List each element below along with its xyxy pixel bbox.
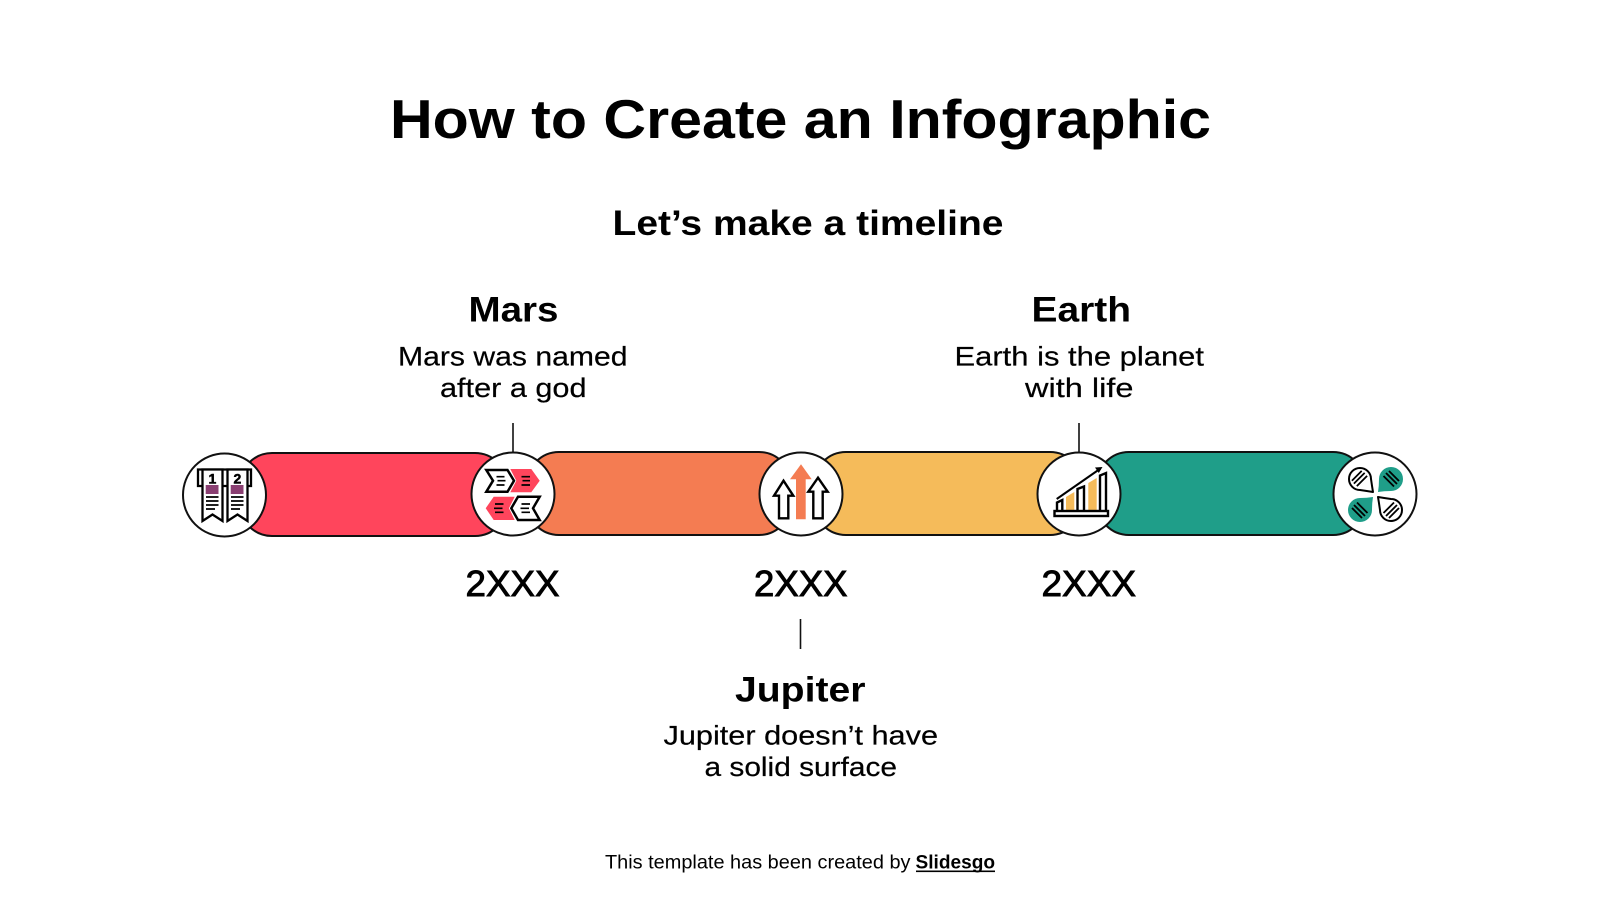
connector: Mars bbox=[512, 423, 514, 453]
footer credit: Slidesgo bbox=[916, 852, 995, 873]
timeline bar bbox=[240, 452, 1365, 536]
text: Jupiter description: Jupiter doesn’t have bbox=[664, 720, 938, 750]
segment: orange bbox=[527, 452, 791, 535]
year label 3: 2XXX bbox=[1042, 563, 1136, 604]
segment: red bbox=[240, 453, 507, 536]
title: How to Create an Infographic bbox=[390, 88, 1211, 150]
connector: Earth bbox=[1078, 423, 1080, 453]
text: Mars description: after a god bbox=[440, 373, 586, 403]
panel: Jupiter bbox=[664, 670, 938, 782]
heading: Jupiter: Jupiter bbox=[735, 670, 866, 710]
year label 1: 2XXX bbox=[466, 563, 560, 604]
text: Earth description: with life bbox=[1024, 373, 1134, 403]
text: Mars description: Mars was named bbox=[398, 341, 628, 371]
panel: Mars bbox=[398, 290, 628, 403]
year label 2: 2XXX bbox=[754, 563, 848, 604]
heading: Earth: Earth bbox=[1032, 290, 1131, 330]
text: Jupiter description bbox=[664, 720, 938, 782]
subtitle: Let’s make a timeline bbox=[612, 204, 1004, 243]
text: Jupiter description: a solid surface bbox=[704, 752, 897, 782]
icon: numbered bookmarks: 1 bbox=[208, 470, 216, 486]
text: Earth description: Earth is the planet bbox=[954, 341, 1205, 371]
icon: up arrows bbox=[760, 452, 842, 536]
segment: teal bbox=[1097, 452, 1365, 535]
icon: four petals bbox=[1334, 452, 1416, 536]
heading: Mars: Mars bbox=[468, 290, 558, 330]
icon: numbered bookmarks bbox=[183, 454, 266, 536]
text: Earth description bbox=[954, 341, 1205, 403]
footer credit: This template has been created by bbox=[605, 852, 911, 873]
icon: growth chart bbox=[1038, 452, 1120, 536]
panel: Earth bbox=[954, 290, 1205, 403]
icon: chevrons bbox=[472, 452, 554, 536]
connector: Jupiter bbox=[800, 619, 802, 649]
text: Mars description bbox=[398, 341, 628, 403]
segment: yellow bbox=[814, 452, 1082, 535]
icon: numbered bookmarks: 2 bbox=[234, 470, 242, 486]
